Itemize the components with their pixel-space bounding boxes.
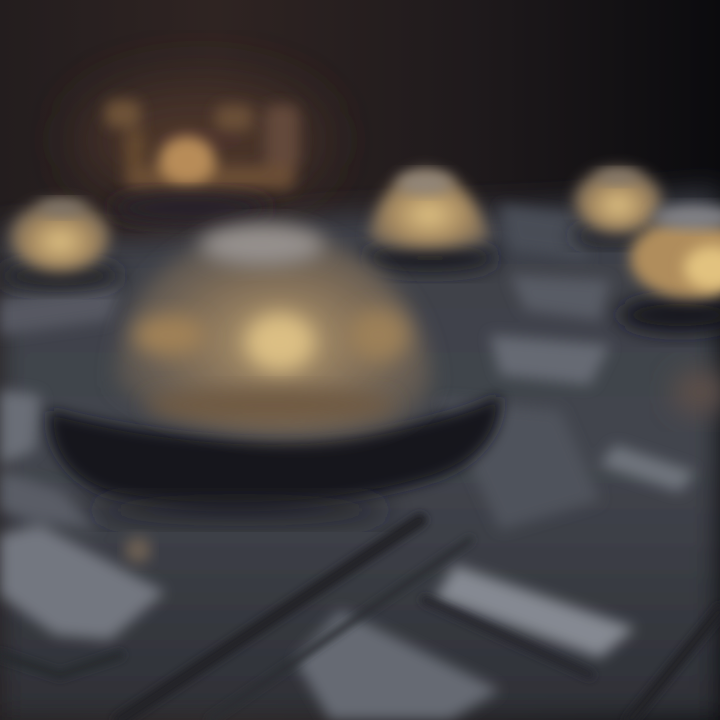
small amber reflection, right [672,370,720,414]
main dome: right glow [348,309,408,361]
keys: right of main dome [490,335,610,385]
background glow behind the far lights [80,85,320,195]
main dome: bright core [246,314,314,370]
key: right small [600,445,695,492]
keys: upper left strip [0,285,120,335]
main dome: lower band [145,389,395,421]
dark key grooves [0,520,720,720]
dome: upper right [570,167,662,245]
keyboard surface [0,190,720,720]
keyboard keys [0,205,695,720]
dome: far right [618,205,720,333]
key: lower left [0,525,165,640]
dark shadow band under far lights [110,194,270,222]
main dome: left glow [134,315,206,355]
key: lower right wide [435,565,635,658]
key: left edge [0,390,40,465]
shadow under bowl [90,498,390,522]
key: bottom centre [295,610,500,720]
dome: centre [362,168,498,272]
main dome: black base bowl [49,395,501,507]
main dome: glass sphere [115,225,432,438]
small amber reflection, lower left [125,537,151,563]
dome: left [0,200,122,289]
main dome: white top highlight [200,225,324,265]
far glowing lights [105,100,299,189]
